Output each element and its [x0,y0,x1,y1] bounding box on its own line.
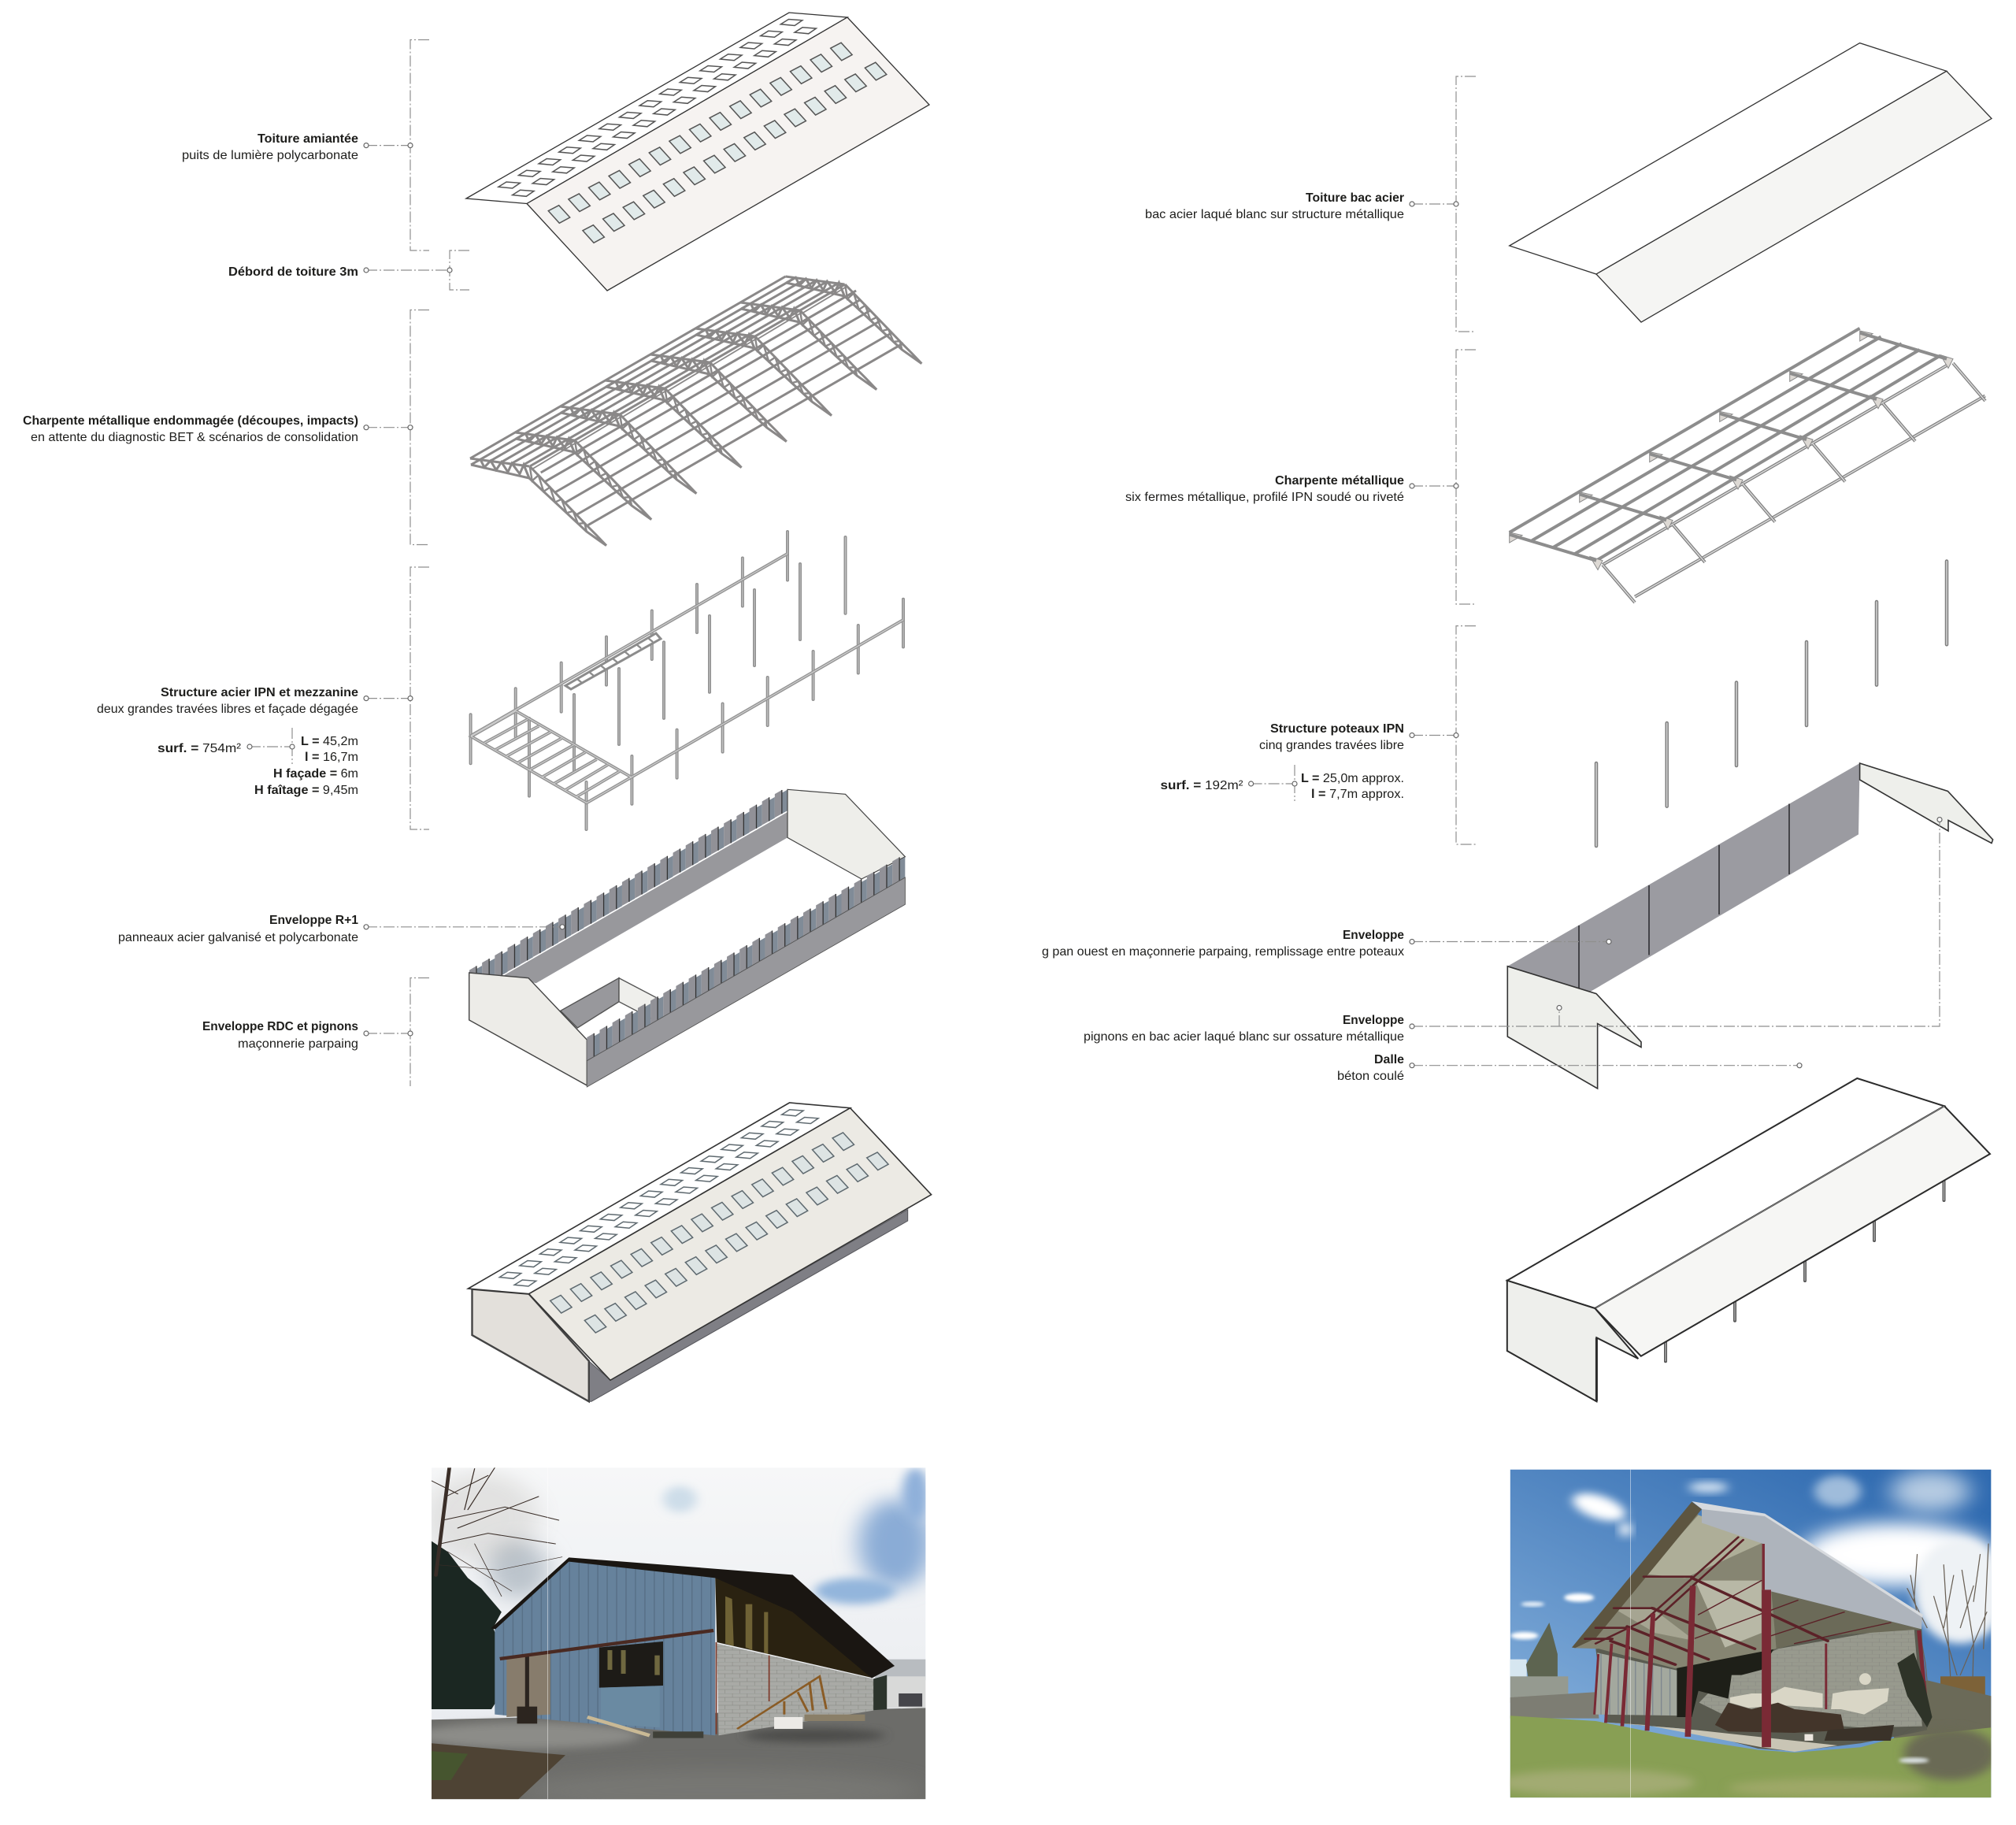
dimensions right [1301,772,1404,801]
dimensions right: L = 25,0m approx. [1301,772,1404,785]
drawing: IPN columns [1596,561,1947,846]
label: structure acier IPN et mezzanine: deux grandes travées libres et façade dégagée [97,703,358,716]
label: enveloppe R+1: Enveloppe R+1 [269,914,358,927]
label: enveloppe pignons: Enveloppe [1343,1014,1404,1027]
label: enveloppe pignons [1084,1014,1404,1044]
label: enveloppe R+1 [118,914,358,944]
label: surface left: surf. = 754m² [158,742,242,755]
label: toiture amiantée: Toiture amiantée [258,132,358,146]
label: dalle: Dalle [1374,1053,1404,1066]
photo: open barn with red steel columns [1496,1470,2007,1797]
label: enveloppe RDC et pignons: Enveloppe RDC et pignons [202,1020,358,1033]
bracket: structure poteaux [1410,626,1476,844]
label: surface right: surf. = 192m² [1161,779,1243,792]
dimensions left: H faîtage = 9,45m [254,784,358,797]
label: structure acier IPN et mezzanine [97,686,358,716]
label: charpente métallique endommagée: Charpente métallique endommagée (découpes, impacts) [23,414,358,428]
label: charpente métallique: six fermes métallique, profilé IPN soudé ou riveté [1125,491,1404,504]
leader: enveloppe R+1 [364,925,565,929]
bracket: charpente métallique [1410,350,1476,604]
leader: enveloppe pignons [1410,818,1942,1029]
bracket: enveloppe RDC [364,978,429,1086]
label: enveloppe RDC et pignons: maçonnerie parpaing [238,1037,358,1051]
label: toiture bac acier: Toiture bac acier [1306,191,1404,205]
label: enveloppe R+1: panneaux acier galvanisé et polycarbonate [118,931,358,944]
label: charpente métallique endommagée [23,414,358,444]
drawing: steel deck roof [1510,43,1992,322]
label: structure poteaux IPN: Structure poteaux IPN [1270,722,1404,736]
drawing: steel columns, beams and mezzanine [471,532,903,829]
leader: enveloppe pan ouest [1410,939,1611,944]
label: dalle [1337,1053,1404,1083]
label: toiture bac acier [1145,191,1404,221]
dimensions left: L = 45,2m [301,735,358,748]
panel: left building exploded labels [23,39,469,1086]
bracket: toiture bac acier [1410,76,1476,332]
leader: dalle [1410,1063,1802,1068]
bracket: toiture amiantée [364,39,429,250]
label: débord de toiture: Débord de toiture 3m [228,265,358,279]
label: structure poteaux IPN [1259,722,1404,752]
label: toiture amiantée: puits de lumière polycarbonate [182,149,358,162]
drawing: assembled existing building [468,1103,932,1401]
bracket: charpente [364,310,429,545]
dimensions left: l = 16,7m [305,751,358,764]
bracket: débord [364,250,469,290]
drawing: west masonry wall and gables [1507,763,1993,1089]
drawing: damaged steel truss frame [470,276,921,546]
dimensions left: H façade = 6m [273,767,358,781]
leader: surface left [247,728,295,764]
label: enveloppe pan ouest: g pan ouest en maçonnerie parpaing, remplissage entre poteaux [1042,945,1404,959]
drawing: assembled open barn [1507,1078,1990,1401]
drawing: roof with skylights [466,13,929,291]
photo: existing corrugated steel barn [417,1467,932,1812]
label: enveloppe RDC et pignons [202,1020,358,1051]
label: enveloppe pan ouest [1042,929,1404,959]
label: charpente métallique: Charpente métallique [1275,474,1404,488]
bracket: structure [364,567,429,829]
label: enveloppe pan ouest: Enveloppe [1343,929,1404,942]
dimensions left [254,735,358,797]
dimensions right: l = 7,7m approx. [1311,788,1404,801]
label: charpente métallique [1125,474,1404,504]
drawing: envelope of steel panels and masonry gables [469,789,905,1087]
label: enveloppe pignons: pignons en bac acier laqué blanc sur ossature métallique [1084,1030,1404,1044]
label: toiture amiantée [182,132,358,162]
leader: surface right [1249,765,1297,801]
label: structure acier IPN et mezzanine: Structure acier IPN et mezzanine [161,686,358,699]
label: charpente métallique endommagée: en attente du diagnostic BET & scénarios de consolidation [31,431,358,444]
drawing: six steel trusses [1510,328,1985,603]
label: structure poteaux IPN: cinq grandes travées libre [1259,739,1404,752]
label: toiture bac acier: bac acier laqué blanc sur structure métallique [1145,208,1404,221]
label: dalle: béton coulé [1337,1070,1404,1083]
panel: right building exploded labels [1042,76,1476,1083]
